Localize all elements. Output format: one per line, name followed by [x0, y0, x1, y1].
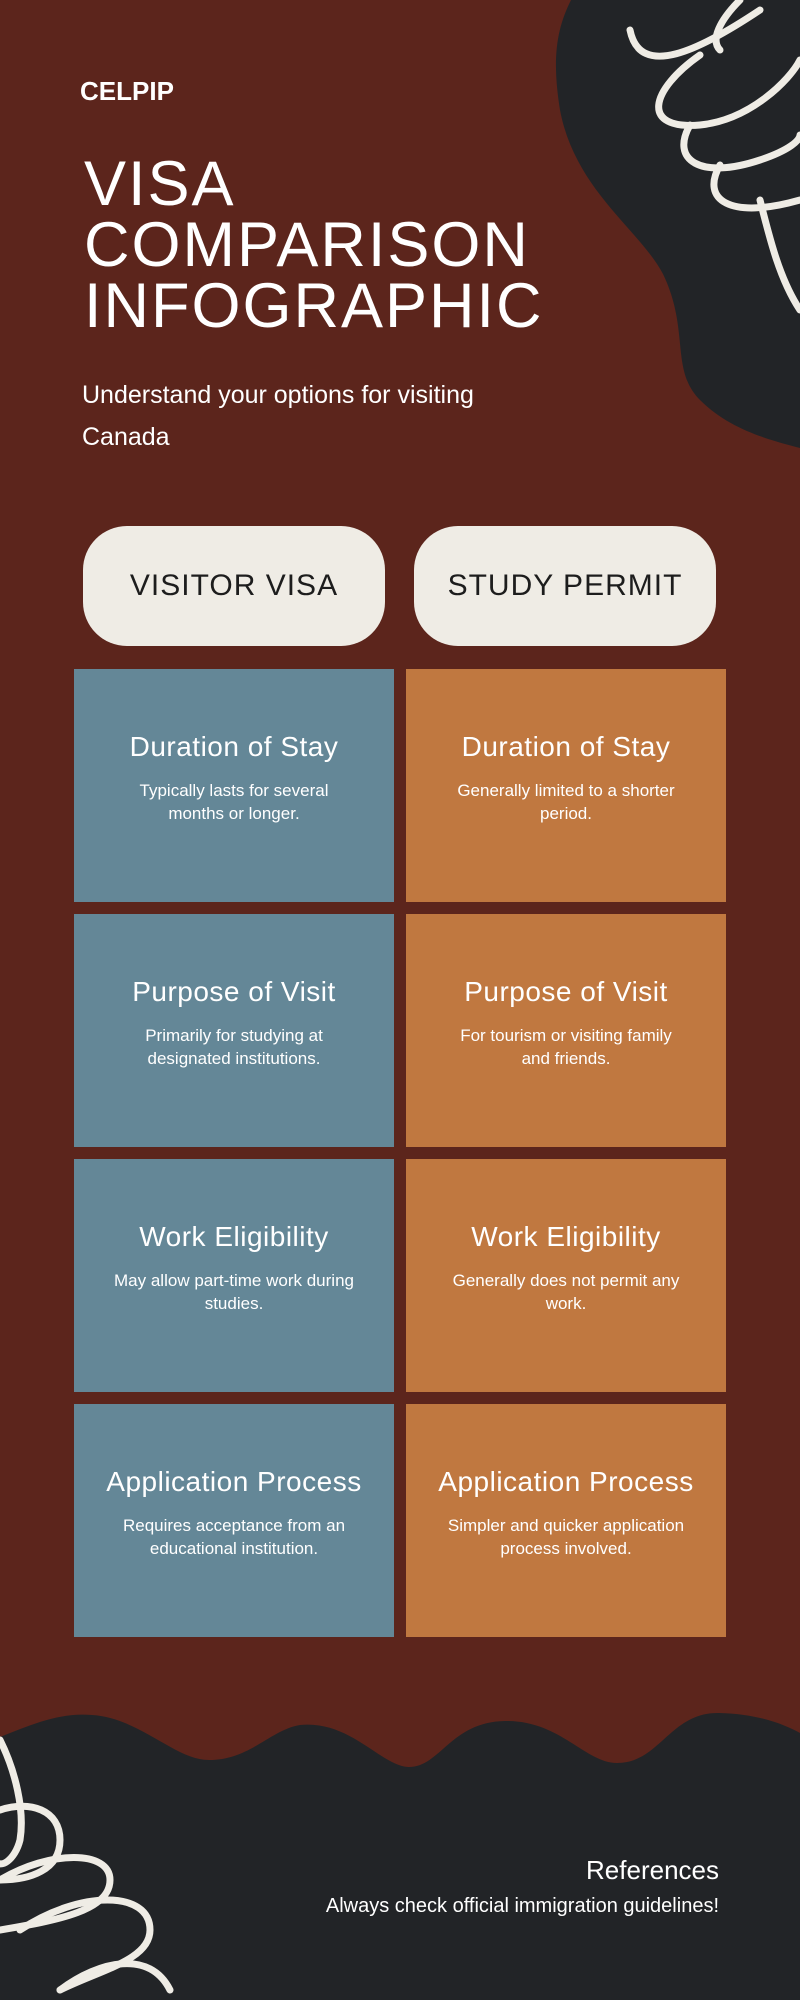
cell: visitor duration	[74, 669, 394, 902]
cell: study application	[406, 1404, 726, 1637]
references note: Always check official immigration guidelines!	[326, 1895, 719, 1917]
wave: bottom dark area	[0, 1713, 800, 2000]
title: COMPARISON	[84, 210, 530, 280]
header: visitor visa	[83, 526, 385, 646]
cell: study duration	[406, 669, 726, 902]
title: VISA	[84, 149, 236, 219]
cell: visitor work: May allow part-time work during studies.	[114, 1271, 354, 1313]
cell: visitor duration: Duration of Stay	[130, 731, 338, 762]
subtitle: Understand your options for visiting	[82, 381, 474, 409]
title	[84, 149, 544, 341]
cell: visitor application: Application Process	[106, 1466, 362, 1497]
title: INFOGRAPHIC	[84, 271, 544, 341]
subtitle: Canada	[82, 423, 170, 451]
cell: study purpose: Purpose of Visit	[464, 976, 668, 1007]
cell: visitor application	[74, 1404, 394, 1637]
references heading: References	[586, 1855, 719, 1885]
cell: study application: Application Process	[438, 1466, 694, 1497]
cell: visitor purpose	[74, 914, 394, 1147]
cell: study application: Simpler and quicker application process involved.	[448, 1516, 684, 1558]
cell: study duration: Generally limited to a shorter period.	[457, 781, 675, 823]
header: visitor visa: VISITOR VISA	[130, 569, 338, 602]
cell: study work: Generally does not permit any work.	[453, 1271, 679, 1313]
cell: study purpose	[406, 914, 726, 1147]
header: study permit	[414, 526, 716, 646]
cell: visitor purpose: Purpose of Visit	[132, 976, 336, 1007]
cell: visitor purpose: Primarily for studying at designated institutions.	[145, 1026, 323, 1068]
cell: visitor work	[74, 1159, 394, 1392]
cell: study work	[406, 1159, 726, 1392]
cell: study duration: Duration of Stay	[462, 731, 670, 762]
header: study permit: STUDY PERMIT	[448, 569, 682, 602]
cell: visitor duration: Typically lasts for several months or longer.	[140, 781, 328, 823]
blob: top right	[556, 0, 800, 448]
cell: study work: Work Eligibility	[471, 1221, 661, 1252]
cell: visitor work: Work Eligibility	[139, 1221, 329, 1252]
cell: visitor application: Requires acceptance from an educational institution.	[123, 1516, 345, 1558]
cell: study purpose: For tourism or visiting family and friends.	[460, 1026, 672, 1068]
brand: CELPIP: CELPIP	[80, 76, 174, 106]
subtitle	[82, 381, 474, 451]
